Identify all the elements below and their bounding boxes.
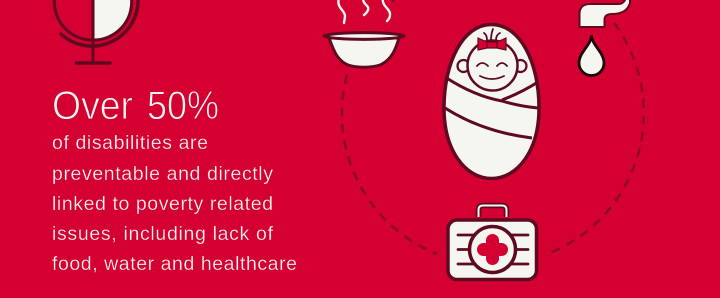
stripes — [458, 235, 528, 264]
bow — [478, 38, 506, 50]
heading: Over 50%: Over — [52, 84, 133, 128]
steam — [338, 0, 390, 23]
head — [468, 40, 518, 90]
icon: water tap — [580, 0, 630, 27]
dashed circle connecting icons — [342, 0, 644, 254]
icon: swaddled baby — [444, 24, 539, 178]
text block: description: of disabilities are — [52, 132, 208, 154]
heading: Over 50%: 50% — [147, 84, 219, 128]
handle — [478, 206, 506, 217]
swaddle — [444, 24, 539, 178]
text block: description: linked to poverty related — [52, 193, 273, 215]
bowl rim — [324, 33, 404, 39]
icon: steaming bowl — [324, 0, 404, 67]
text block: description: issues, including lack of — [52, 223, 274, 245]
text block: description — [52, 132, 297, 275]
icon: water drop — [579, 35, 604, 76]
text block: description: preventable and directly — [52, 163, 273, 185]
cross — [484, 240, 502, 258]
circle emblem — [470, 226, 516, 272]
face — [477, 29, 507, 79]
bowl body — [329, 38, 399, 67]
case — [448, 220, 536, 280]
ears — [458, 60, 526, 72]
wrap lines — [445, 77, 538, 138]
text block: description: food, water and healthcare — [52, 253, 297, 275]
icon: globe — [54, 0, 138, 63]
icon: first aid kit — [448, 206, 536, 280]
